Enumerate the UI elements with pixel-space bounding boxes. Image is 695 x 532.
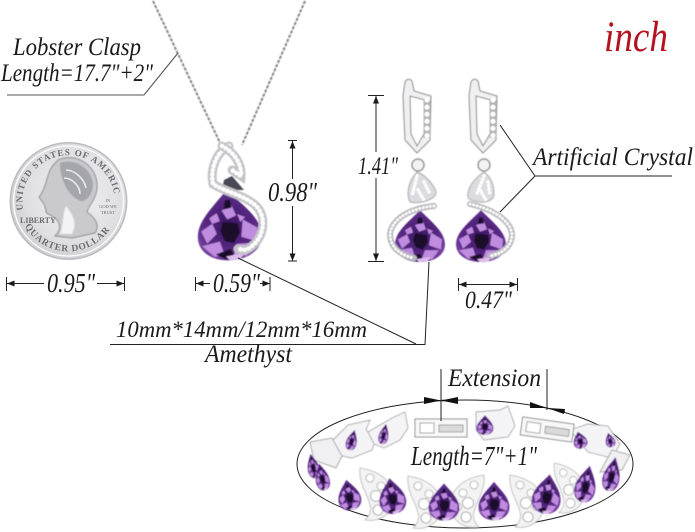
bracelet pave leaves <box>360 468 394 520</box>
pendant dark bail gap <box>222 176 244 190</box>
quarter coin <box>10 142 128 260</box>
earring width dimension 0.47 <box>458 278 518 314</box>
bracelet upper links <box>332 406 620 458</box>
necklace chain <box>153 1 305 147</box>
amethyst leader lines <box>110 258 429 344</box>
earring width dimension 0.47: 0.47" <box>465 287 512 314</box>
left earring pave strip <box>424 100 430 138</box>
bracelet upper gems <box>344 428 360 452</box>
extension guide lines and arrows <box>424 369 565 421</box>
bracelet side links <box>310 438 342 468</box>
lobster clasp text: Length=17.7"+2" <box>0 60 153 87</box>
earring height dimension 1.41 <box>358 96 398 262</box>
pendant amethyst gem <box>195 188 263 262</box>
coin lettering: TRUST <box>101 210 115 215</box>
amethyst size text: 10mm*14mm/12mm*16mm <box>116 317 367 342</box>
unit label: inch: inch <box>604 14 668 61</box>
left earring knot <box>408 172 436 203</box>
lobster clasp callout <box>0 34 178 95</box>
artificial crystal leader lines <box>500 125 672 212</box>
pendant height dimension 0.98: 0.98" <box>268 177 318 207</box>
bracelet fold-over clasps <box>415 419 467 437</box>
bracelet length label: Length=7"+1" <box>410 441 538 471</box>
coin lettering: LIBERTY <box>20 216 56 225</box>
coin lettering: IN <box>106 198 111 203</box>
right earring pave strip <box>490 100 496 138</box>
earring height dimension 1.41: 1.41" <box>358 153 398 180</box>
right earring pave swirl <box>470 176 512 256</box>
right earring hook <box>469 79 497 153</box>
left earring gem <box>395 210 445 262</box>
necklace pendant <box>195 146 263 262</box>
left earring <box>390 79 445 262</box>
right earring <box>456 79 512 262</box>
coin portrait <box>39 158 97 238</box>
pendant height dimension 0.98 <box>268 140 318 261</box>
coin lettering: QUARTER DOLLAR <box>26 224 110 252</box>
pendant pave swirl <box>212 146 263 250</box>
artificial crystal callout <box>500 125 693 212</box>
extension label: Extension <box>447 365 541 392</box>
coin lettering <box>16 149 120 252</box>
left earring pave swirl <box>390 176 434 258</box>
coin width dimension 0.95 <box>6 268 124 298</box>
right earring knot <box>468 172 494 202</box>
bracelet lower gems <box>305 453 321 479</box>
lobster clasp leader line <box>7 53 178 95</box>
right earring link <box>478 159 490 171</box>
coin width dimension 0.95: 0.95" <box>47 268 96 298</box>
amethyst label: Amethyst <box>203 341 293 368</box>
left earring link <box>412 159 424 171</box>
lobster clasp text: Lobster Clasp <box>12 34 141 61</box>
lobster clasp text <box>0 34 153 87</box>
bracelet <box>305 406 630 528</box>
pendant width dimension 0.59: 0.59" <box>213 268 261 298</box>
extension dimension <box>424 365 565 421</box>
right earring gem <box>456 210 506 262</box>
coin lettering: GOD WE <box>99 204 117 209</box>
left earring hook <box>403 79 431 153</box>
amethyst callout <box>110 258 429 368</box>
bracelet callout ellipse <box>297 400 633 528</box>
